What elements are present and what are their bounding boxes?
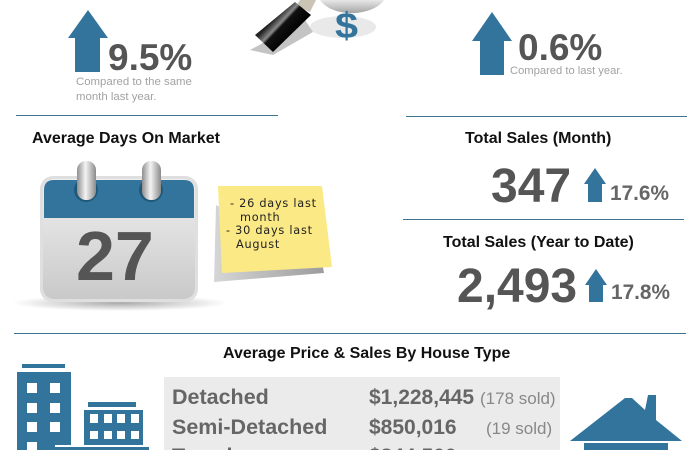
icon: apartment buildings (17, 364, 149, 450)
icon: calendar showing 27: 27 (76, 217, 154, 295)
caption: compared to same month: month last year. (76, 91, 156, 103)
stat: total sales month (465, 130, 669, 213)
sticky note: month (240, 211, 280, 224)
caption: compared to last year: Compared to last year. (510, 65, 623, 77)
panel: price table (164, 377, 560, 450)
percent: 17.8%: 17.8% (611, 281, 670, 304)
sticky note: - 30 days last (226, 224, 313, 237)
icon: up arrow (585, 269, 607, 302)
row: detached: Detached (172, 385, 269, 409)
row: semi-detached (172, 415, 552, 439)
row: townhouse (172, 444, 552, 450)
number: 0.6%: 0.6% (518, 27, 602, 68)
sticky note: August (236, 238, 280, 251)
row: semi-detached: (19 sold) (486, 419, 552, 438)
number: 9.5%: 9.5% (108, 37, 192, 78)
icon: up arrow (472, 12, 512, 75)
stat: price change 9.5% (68, 10, 192, 103)
icon: magnifying glass over dollar sign (250, 0, 384, 55)
icon: up arrow (584, 168, 606, 202)
stat: total sales year to date (443, 234, 670, 313)
sticky note (214, 186, 332, 282)
icon: calendar showing 27 (12, 161, 228, 311)
heading: total sales month: Total Sales (Month) (465, 130, 611, 147)
icon: up arrow (68, 10, 108, 72)
stat: 0.6% change (472, 12, 623, 77)
heading: average price and sales by house type: Average Price & Sales By House Type (223, 345, 510, 362)
row: semi-detached: Semi-Detached (172, 415, 327, 439)
icon: magnifying glass over dollar sign: $ (335, 6, 358, 46)
heading: total sales year to date: Total Sales (Year to Date) (443, 234, 634, 251)
icon: house (570, 395, 682, 450)
row: semi-detached: $850,016 (369, 416, 457, 439)
row: detached: (178 sold) (480, 389, 556, 408)
number: 347: 347 (491, 160, 571, 213)
sticky note: - 26 days last (230, 197, 317, 210)
number: 2,493: 2,493 (457, 260, 577, 313)
row: detached (172, 385, 556, 409)
row: detached: $1,228,445 (369, 386, 474, 409)
percent: 17.6%: 17.6% (610, 182, 669, 205)
heading: average days on market: Average Days On Market (32, 130, 221, 147)
caption: compared to same month: Compared to the same (76, 76, 192, 88)
